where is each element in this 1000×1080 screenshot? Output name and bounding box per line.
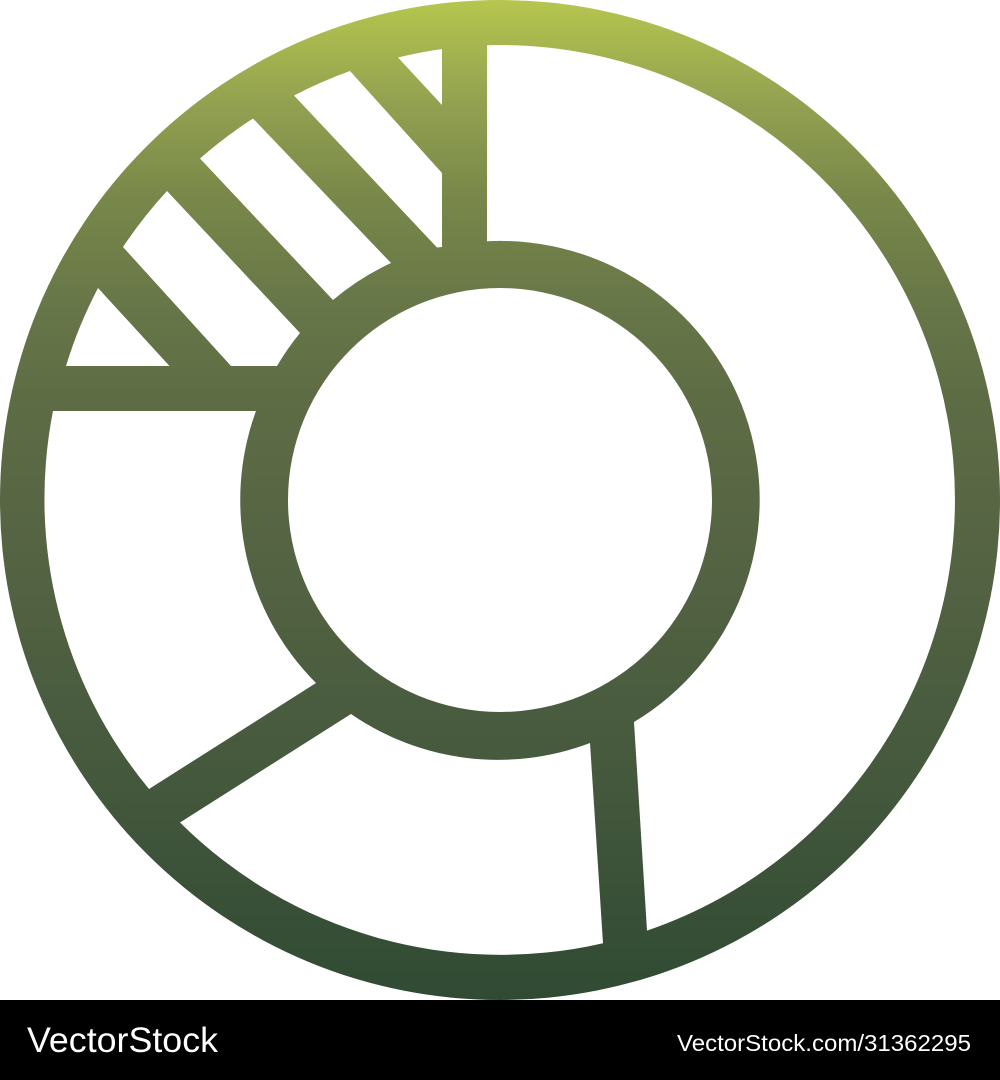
image id text: VectorStock.com/31362295	[677, 1030, 971, 1056]
footer band	[0, 1000, 1000, 1080]
segment: bottom	[180, 714, 603, 955]
watermark logo text: VectorStock	[27, 1021, 219, 1060]
centre hole	[288, 288, 712, 712]
segment: left	[44, 411, 316, 789]
segment: large right	[487, 45, 955, 931]
hatched stripes: upper-left segment	[66, 49, 442, 366]
